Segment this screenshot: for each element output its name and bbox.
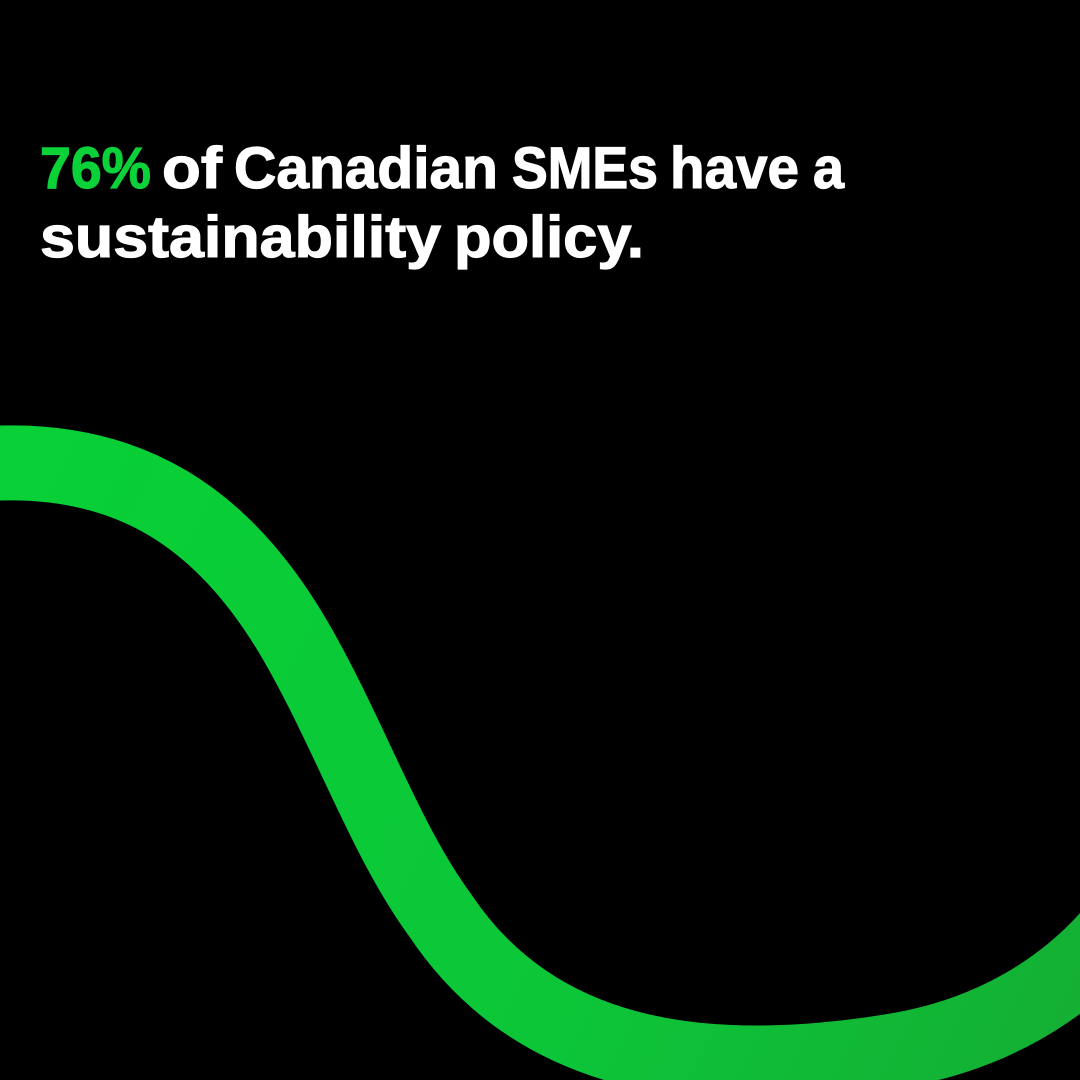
green wave ribbon — [0, 463, 1080, 1063]
title: Canadian — [234, 136, 498, 201]
title: have — [670, 136, 799, 201]
title: a — [813, 136, 845, 201]
title: SMEs — [512, 136, 658, 201]
title: of — [162, 136, 223, 201]
title — [40, 136, 845, 270]
title: sustainability — [40, 205, 441, 270]
title: policy. — [454, 205, 644, 270]
highlighted statistic: 76%: 76% — [40, 136, 151, 201]
